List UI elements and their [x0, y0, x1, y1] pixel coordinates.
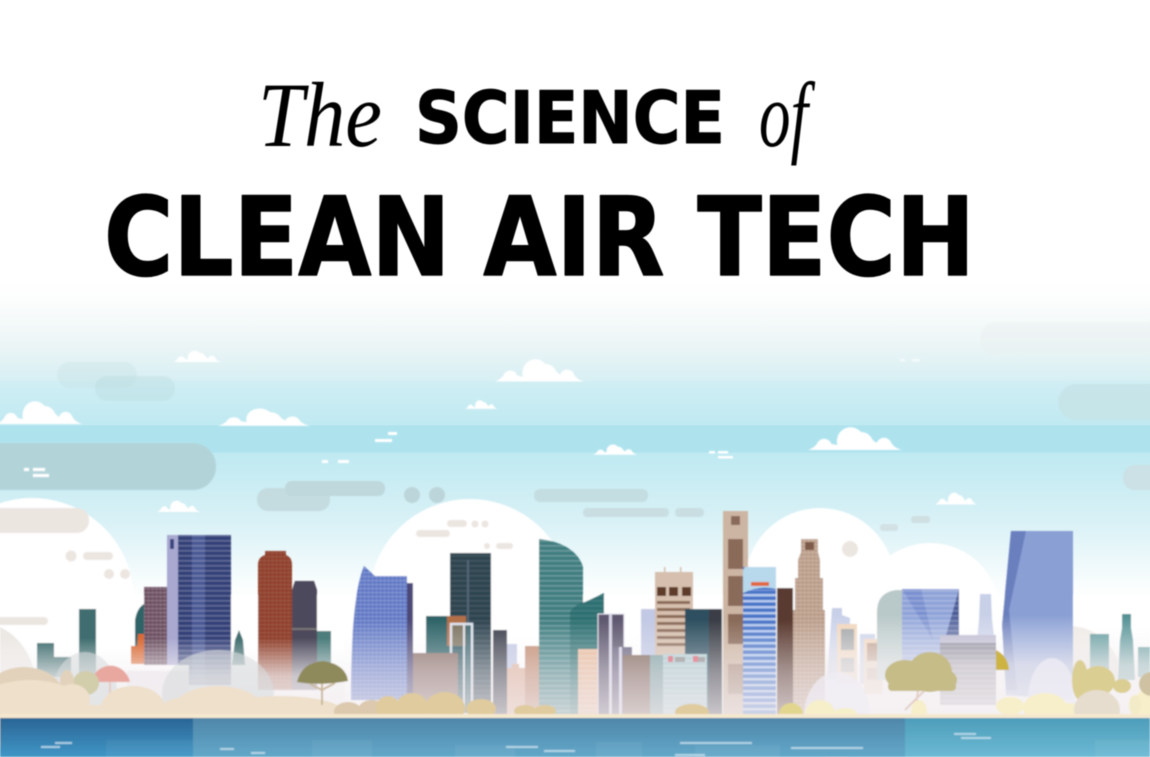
teal curved tower — [539, 539, 583, 715]
brown low block — [413, 653, 458, 713]
water glints — [41, 733, 991, 756]
blue curved tower — [351, 566, 413, 703]
tall blue angled tower — [1002, 531, 1073, 700]
right sage tree — [1072, 660, 1141, 715]
grey dome block — [877, 590, 902, 680]
navy glass tower — [167, 535, 231, 685]
yellow accent tree — [996, 650, 1009, 670]
right teal towers — [1090, 614, 1150, 680]
pale mist domes right — [804, 658, 1076, 757]
blue angled block — [902, 589, 959, 664]
base haze left — [0, 638, 345, 714]
dark brown block — [777, 588, 793, 715]
title word: The: The — [258, 64, 382, 166]
grey mist mounds left — [53, 650, 274, 738]
grey mound — [1074, 690, 1120, 730]
peach blocks — [507, 644, 539, 715]
pale haze marks on domes — [0, 508, 858, 625]
base haze centre — [345, 620, 825, 716]
sky background — [0, 280, 1150, 620]
water panels — [0, 718, 193, 757]
dark purple tower — [292, 581, 317, 690]
small sage tree — [73, 671, 99, 695]
left back tan mounds — [0, 667, 74, 727]
peach window blocks — [837, 624, 883, 694]
orange low block — [131, 634, 144, 664]
title word: SCIENCE: SCIENCE — [415, 76, 725, 160]
clouds and haze — [0, 322, 1150, 531]
small white dashes — [24, 359, 920, 477]
white domes behind skyline — [0, 498, 1150, 718]
dark teal block — [685, 609, 722, 715]
skyline buildings — [0, 511, 1150, 757]
right olive tree — [885, 652, 957, 715]
brown and grey low blocks — [623, 654, 707, 715]
title line: CLEAN AIR TECH: CLEAN AIR TECH — [104, 174, 975, 301]
pale water patches — [106, 740, 1150, 757]
title — [104, 64, 975, 301]
left teal buildings — [37, 604, 245, 678]
red tower — [258, 551, 292, 690]
title word: of: of — [759, 64, 816, 166]
stepped tan tower — [793, 539, 825, 715]
teal second wing — [570, 593, 604, 715]
base haze right — [825, 615, 1150, 715]
mauve tower — [144, 587, 168, 665]
haze pills, grey-blue — [0, 322, 1150, 531]
tan office tower — [655, 567, 693, 662]
tall tan tower with window panels — [723, 511, 748, 715]
pink round tree — [91, 666, 130, 703]
white clouds — [0, 351, 977, 512]
trees and shrubs — [0, 650, 1150, 752]
peach striped block — [578, 649, 598, 715]
right pale mound — [1073, 626, 1118, 680]
teal annex — [317, 631, 331, 681]
shoreline — [0, 714, 1150, 718]
soft illustrated scene — [0, 322, 1150, 757]
dark slate tower — [450, 553, 491, 713]
pale blue block — [641, 609, 655, 659]
teal block and frame — [426, 616, 472, 710]
grey stacked block — [940, 635, 996, 705]
pale pink dome — [0, 627, 36, 680]
thin dark tower — [493, 630, 507, 715]
olive umbrella tree — [297, 661, 348, 705]
water — [0, 718, 1150, 757]
right tan tree — [1139, 672, 1150, 696]
purple twin block — [598, 614, 632, 715]
left front tan mounds — [0, 680, 342, 752]
white low block — [127, 665, 189, 710]
yellow shrubs right — [779, 689, 1150, 728]
blue striped glass tower — [743, 567, 776, 715]
centre shrubs — [334, 692, 709, 724]
pale towers — [827, 594, 997, 684]
